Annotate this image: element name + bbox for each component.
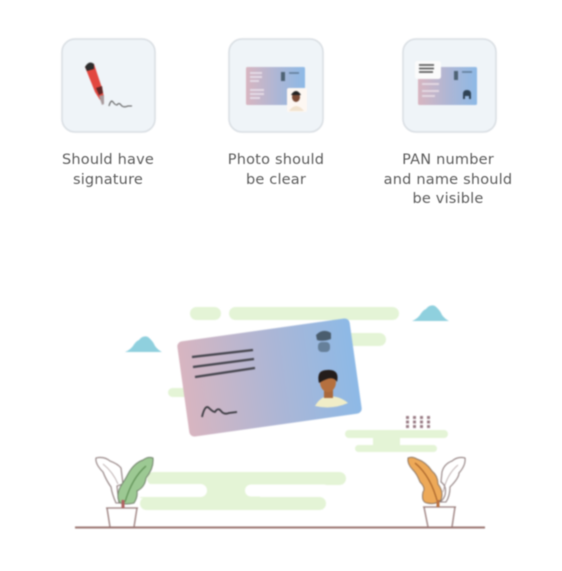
pot <box>423 507 456 527</box>
white leaf <box>96 457 123 503</box>
icon: portrait photo <box>287 88 307 112</box>
icon: silhouette <box>463 90 471 99</box>
background green clouds <box>140 307 448 510</box>
left plant <box>96 457 153 527</box>
green leaf <box>118 457 153 504</box>
icon tile: signature <box>62 39 155 132</box>
caption: signature: Should have <box>62 152 154 168</box>
ground line <box>75 526 485 528</box>
cloud right <box>412 305 449 321</box>
icon tile: PAN number <box>403 39 496 132</box>
dot grid <box>406 416 430 428</box>
orange leaf <box>408 457 442 504</box>
icon tile: photo <box>229 39 323 132</box>
caption: PAN number <box>384 152 512 207</box>
icon: signature scribble <box>109 101 132 107</box>
caption: photo: Photo should <box>228 152 324 168</box>
cloud left <box>125 336 162 352</box>
caption: PAN number: and name should <box>384 172 512 188</box>
caption: signature: signature <box>73 172 143 188</box>
icon: pen <box>85 63 104 105</box>
mini card <box>418 67 477 105</box>
PAN card <box>177 318 362 437</box>
right plant <box>408 457 465 527</box>
mini card <box>246 67 305 105</box>
portrait <box>315 370 348 407</box>
pot <box>106 508 138 527</box>
emblem <box>316 331 331 352</box>
name lines <box>192 350 255 377</box>
caption: PAN number: PAN number <box>402 152 494 168</box>
signature <box>202 407 237 417</box>
caption: PAN number: be visible <box>412 191 484 207</box>
white leaf <box>440 457 465 502</box>
caption: photo: be clear <box>246 172 306 188</box>
caption: photo <box>228 152 324 188</box>
name label <box>415 61 441 79</box>
caption: signature <box>62 152 154 188</box>
